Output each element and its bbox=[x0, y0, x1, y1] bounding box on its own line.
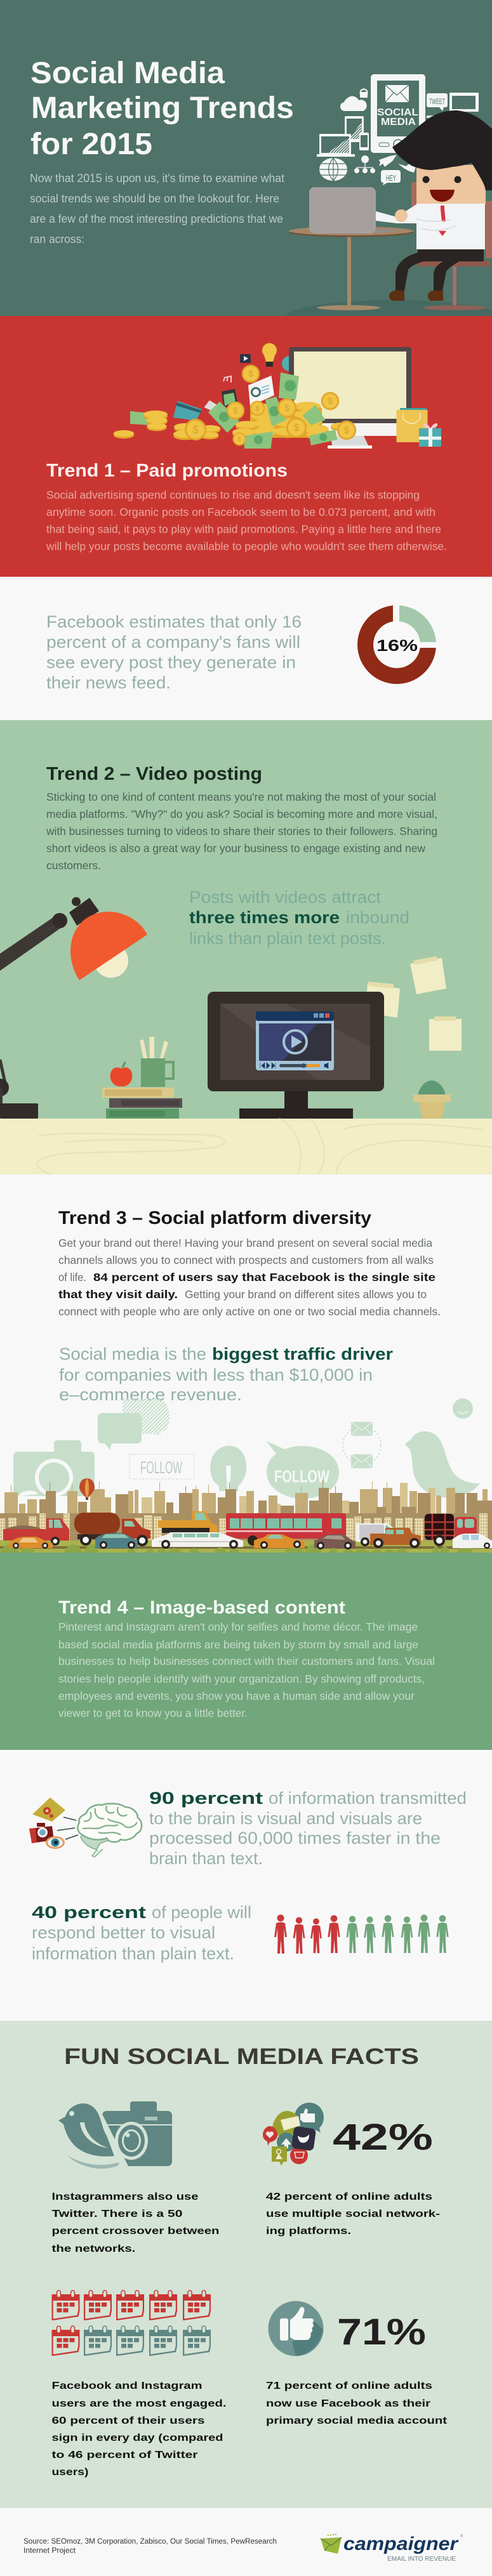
text: trend 3 body: channels allows you to connect with prospects and customers from all walks bbox=[58, 1254, 434, 1266]
illustration: pale social icons: FOLLOW bbox=[140, 1458, 182, 1477]
illustration: books, apple and mug bbox=[102, 1037, 182, 1119]
text: trend 2 body: customers. bbox=[46, 859, 101, 872]
chart: 16 percent donut: 16% bbox=[376, 637, 418, 655]
illustration: monitor bbox=[282, 347, 411, 449]
text: 71 percent fact: primary social media account bbox=[266, 2415, 448, 2426]
illustration: pale social icons bbox=[13, 1398, 480, 1499]
panel: hero bbox=[0, 0, 492, 336]
text: trend 4 body bbox=[58, 1620, 435, 1719]
illustration: social media device icons: MEDIA bbox=[381, 117, 416, 128]
callout: three times more bbox=[189, 888, 409, 948]
text: trend 3 body bbox=[58, 1237, 441, 1318]
text: 90 percent stat: of information transmitted bbox=[269, 1789, 467, 1808]
intro text: social trends we should be on the lookout for. Here bbox=[30, 192, 279, 205]
text: trend 3 body: that they visit daily. bbox=[58, 1288, 178, 1301]
heading: trend 4: Trend 4 – Image-based content bbox=[58, 1598, 345, 1618]
illustration: gift bag and box bbox=[396, 408, 441, 447]
callout: three times more: Posts with videos attract bbox=[189, 888, 382, 907]
text: 90 percent stat bbox=[149, 1789, 467, 1868]
text: facebook estimate: Facebook estimates that only 16 bbox=[46, 612, 302, 631]
panel: trend 3 social platform diversity bbox=[0, 1208, 492, 1750]
icon: bird and camera bbox=[51, 2100, 172, 2170]
illustration: social media device icons bbox=[317, 74, 479, 185]
text: 90 percent stat: to the brain is visual and visuals are bbox=[149, 1809, 422, 1828]
footer: source text bbox=[23, 2538, 277, 2554]
stat: 71 percent: 71% bbox=[337, 2311, 426, 2353]
text: engagement fact: users are the most engaged. bbox=[52, 2398, 226, 2409]
heading: trend 2: Trend 2 – Video posting bbox=[46, 764, 262, 784]
text: trend 1 body: will help your posts become available to people who wouldn't see them otherwise. bbox=[46, 540, 447, 553]
callout: three times more: three times more bbox=[189, 908, 340, 927]
text: facebook estimate bbox=[46, 612, 302, 692]
panel: fun social media facts bbox=[0, 2021, 492, 2508]
text: trend 4 body: Pinterest and Instagram aren't only for selfies and home décor. The image bbox=[58, 1620, 418, 1633]
text: trend 2 body: media platforms. "Why?" do you ask? Social is becoming more and more visual, bbox=[46, 808, 437, 820]
text: 42 percent fact bbox=[266, 2192, 440, 2237]
illustration: potted cactus bbox=[413, 1081, 451, 1119]
callout: biggest traffic driver: e–commerce revenue. bbox=[59, 1385, 242, 1404]
callout: biggest traffic driver: biggest traffic driver bbox=[212, 1344, 394, 1364]
icon: social bubbles cluster bbox=[263, 2103, 324, 2165]
title bbox=[30, 56, 294, 161]
text: trend 3 body: Getting your brand on different sites allows you to bbox=[185, 1288, 427, 1301]
illustration: desk and laptop bbox=[289, 187, 413, 310]
panel: visual stats bbox=[29, 1789, 467, 1963]
chart: 16 percent donut bbox=[357, 605, 436, 684]
callout: three times more: inbound bbox=[346, 908, 409, 927]
panel: trend 4 image-based content bbox=[58, 1598, 435, 1719]
text: 71 percent fact: now use Facebook as their bbox=[266, 2398, 430, 2409]
text: trend 1 body bbox=[46, 489, 447, 553]
text: facebook estimate: see every post they generate in bbox=[46, 653, 296, 672]
text: 42 percent fact: ing platforms. bbox=[266, 2226, 351, 2237]
illustration: social media device icons: TWEET bbox=[429, 97, 445, 106]
text: 40 percent stat: information than plain text. bbox=[32, 1944, 234, 1963]
text: 90 percent stat: brain than text. bbox=[149, 1849, 263, 1868]
text: 40 percent stat: 40 percent bbox=[32, 1903, 146, 1922]
text: engagement fact: Facebook and Instagram bbox=[52, 2381, 202, 2391]
intro text: ran across: bbox=[30, 233, 84, 246]
text: trend 4 body: based social media platforms are being taken by storm by small and large bbox=[58, 1638, 418, 1651]
logo: campaigner: ® bbox=[460, 2534, 463, 2539]
panel: trend 1 paid promotions bbox=[0, 316, 492, 577]
title: Social Media bbox=[30, 56, 225, 90]
logo: campaigner: campaigner bbox=[343, 2533, 459, 2554]
panel: trend 2 video posting bbox=[0, 720, 492, 1174]
callout: three times more: links than plain text posts. bbox=[189, 929, 386, 948]
footer: source text: Internet Project bbox=[23, 2547, 76, 2554]
heading: trend 3: Trend 3 – Social platform diversity bbox=[58, 1208, 371, 1228]
text: engagement fact: to 46 percent of Twitter bbox=[52, 2450, 198, 2461]
logo: campaigner bbox=[321, 2533, 463, 2563]
illustration: social media device icons: HEY bbox=[386, 173, 396, 183]
text: 71 percent fact: 71 percent of online adults bbox=[266, 2381, 432, 2391]
callout: biggest traffic driver: Social media is the bbox=[59, 1344, 206, 1364]
text: instagrammers fact bbox=[52, 2192, 220, 2254]
illustration: money pile bbox=[114, 365, 356, 449]
footer: source text: Source: SEOmoz, 3M Corporation, Zabisco, Our Social Times, PewResearch bbox=[23, 2538, 277, 2546]
chart: people pictogram bbox=[274, 1914, 449, 1954]
text: trend 1 body: anytime soon. Organic posts on Facebook seem to be 0.073 percent, and with bbox=[46, 506, 435, 518]
text: engagement fact: sign in every day (compared bbox=[52, 2433, 223, 2443]
illustration: hot air balloon bbox=[79, 1478, 95, 1500]
text: trend 3 body: 84 percent of users say that Facebook is the single site bbox=[93, 1271, 435, 1284]
icon: photo, camera and eye bbox=[29, 1797, 78, 1849]
stat: 42 percent: 42% bbox=[333, 2117, 433, 2158]
illustration: businessman character bbox=[376, 110, 492, 310]
title: Marketing Trends bbox=[31, 91, 294, 125]
text: trend 3 body: Get your brand out there! Having your brand present on several social media bbox=[58, 1237, 432, 1249]
illustration: road and hedges bbox=[0, 1541, 492, 1750]
text: 40 percent stat: respond better to visual bbox=[32, 1923, 215, 1942]
text: 42 percent fact: use multiple social network- bbox=[266, 2209, 440, 2219]
callout: biggest traffic driver: for companies with less than $10,000 in bbox=[59, 1365, 373, 1384]
text: trend 1 body: that being said, it pays to play with paid promotions. Paying a little here and there bbox=[46, 523, 441, 536]
text: trend 3 body: of life. bbox=[58, 1271, 86, 1284]
text: 40 percent stat: of people will bbox=[152, 1903, 251, 1922]
illustration: social media device icons: SOCIAL bbox=[377, 107, 418, 118]
text: instagrammers fact: percent crossover between bbox=[52, 2226, 220, 2237]
text: instagrammers fact: the networks. bbox=[52, 2244, 136, 2254]
text: engagement fact bbox=[52, 2381, 226, 2478]
icon: thumbs up bbox=[268, 2301, 324, 2356]
panel: 16 percent stat bbox=[0, 577, 492, 720]
illustration: wooden desk bbox=[0, 1119, 492, 1174]
title: for 2015 bbox=[30, 128, 152, 161]
text: trend 4 body: viewer to get to know you a little better. bbox=[58, 1707, 248, 1719]
text: 42 percent fact: 42 percent of online adults bbox=[266, 2192, 432, 2202]
illustration: desk lamp bbox=[0, 897, 147, 1119]
text: engagement fact: users) bbox=[52, 2467, 89, 2478]
illustration: sticky notes bbox=[365, 956, 462, 1051]
text: 71 percent fact bbox=[266, 2381, 448, 2426]
callout: biggest traffic driver bbox=[59, 1344, 394, 1404]
text: 90 percent stat: processed 60,000 times faster in the bbox=[149, 1829, 441, 1848]
intro text: are a few of the most interesting predictions that we bbox=[30, 213, 283, 225]
illustration: pale social icons: FOLLOW bbox=[274, 1467, 329, 1486]
text: trend 2 body bbox=[46, 791, 437, 872]
text: engagement fact: 60 percent of their users bbox=[52, 2415, 205, 2426]
chart: calendar pictogram bbox=[52, 2290, 211, 2355]
text: trend 3 body: connect with people who are only active on one or two social media channels. bbox=[58, 1305, 441, 1318]
logo: campaigner: EMAIL INTO REVENUE bbox=[387, 2556, 456, 2563]
illustration: traffic vehicles bbox=[3, 1511, 492, 1549]
text: trend 2 body: Sticking to one kind of content means you're not making the most of your social bbox=[46, 791, 436, 803]
illustration: scattered icons bbox=[173, 343, 277, 421]
text: facebook estimate: their news feed. bbox=[46, 673, 171, 692]
text: trend 2 body: short videos is also a great way for your business to engage existing and new bbox=[46, 842, 425, 855]
intro text: Now that 2015 is upon us, it's time to examine what bbox=[30, 172, 284, 185]
icon: brain bbox=[77, 1804, 142, 1857]
text: instagrammers fact: Twitter. There is a 50 bbox=[52, 2209, 183, 2219]
text: trend 4 body: employees and events, you show you have a human side and allow your bbox=[58, 1690, 415, 1702]
illustration: monitor with video player bbox=[208, 992, 384, 1119]
illustration: ground shadow bbox=[284, 300, 492, 336]
text: trend 2 body: with businesses turning to videos to share their stories to their followers. Sharing bbox=[46, 825, 437, 838]
heading: trend 1: Trend 1 – Paid promotions bbox=[46, 461, 288, 481]
text: 40 percent stat bbox=[32, 1903, 251, 1963]
text: 90 percent stat: 90 percent bbox=[149, 1789, 263, 1808]
intro text bbox=[30, 172, 284, 246]
illustration: city skyline bbox=[0, 1480, 492, 1544]
text: instagrammers fact: Instagrammers also use bbox=[52, 2192, 199, 2202]
text: trend 4 body: businesses to help businesses connect with their customers and fans. Visual bbox=[58, 1655, 435, 1667]
text: facebook estimate: percent of a company's fans will bbox=[46, 633, 300, 652]
text: trend 4 body: stories help people identify with your organization. By showing off products, bbox=[58, 1672, 425, 1685]
heading: fun facts: FUN SOCIAL MEDIA FACTS bbox=[64, 2044, 419, 2069]
text: trend 1 body: Social advertising spend continues to rise and doesn't seem like its stopping bbox=[46, 489, 420, 501]
